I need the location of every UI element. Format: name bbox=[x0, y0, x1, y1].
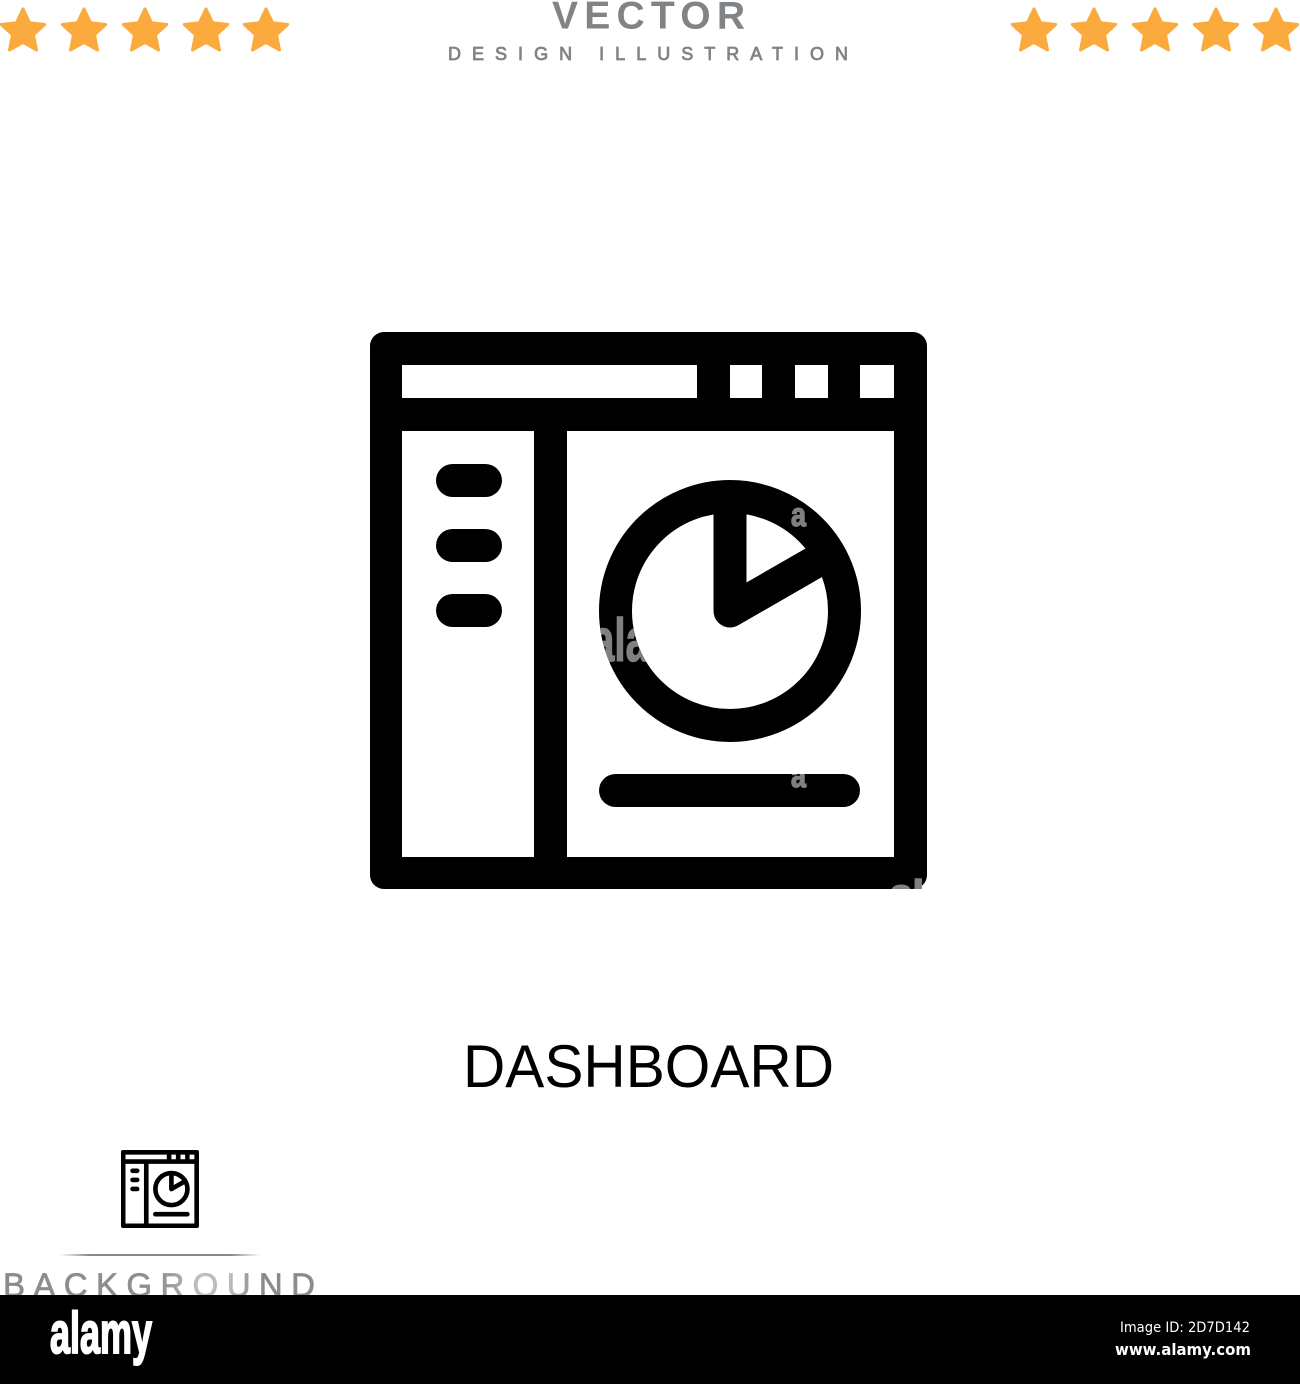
watermark fragments: a bbox=[791, 496, 807, 533]
left star rating bbox=[1, 9, 288, 50]
icon: caption bar bbox=[599, 774, 860, 807]
main dashboard icon bbox=[370, 332, 927, 910]
watermark fragments: al bbox=[890, 873, 924, 910]
watermark fragments: ala bbox=[592, 607, 648, 674]
divider line bbox=[60, 1254, 260, 1256]
website: www.alamy.com bbox=[1115, 1340, 1251, 1359]
right star rating bbox=[1012, 9, 1298, 50]
watermark fragments bbox=[600, 508, 922, 889]
icon: window frame bbox=[370, 332, 927, 889]
small dashboard icon bbox=[121, 1150, 199, 1228]
title: dashboard: DASHBOARD bbox=[463, 1033, 834, 1100]
footer band bbox=[0, 1295, 1300, 1384]
icon: pie chart bbox=[616, 496, 844, 726]
watermark fragments: a bbox=[791, 757, 807, 794]
logo: alamy: alamy bbox=[50, 1301, 152, 1366]
icon: sidebar menu lines bbox=[436, 464, 502, 627]
subheading: design illustration: DESIGN ILLUSTRATION bbox=[448, 44, 848, 64]
label: background: BACKGROUND bbox=[3, 1266, 315, 1304]
image id: Image ID: 2D7D142 bbox=[1120, 1320, 1250, 1336]
